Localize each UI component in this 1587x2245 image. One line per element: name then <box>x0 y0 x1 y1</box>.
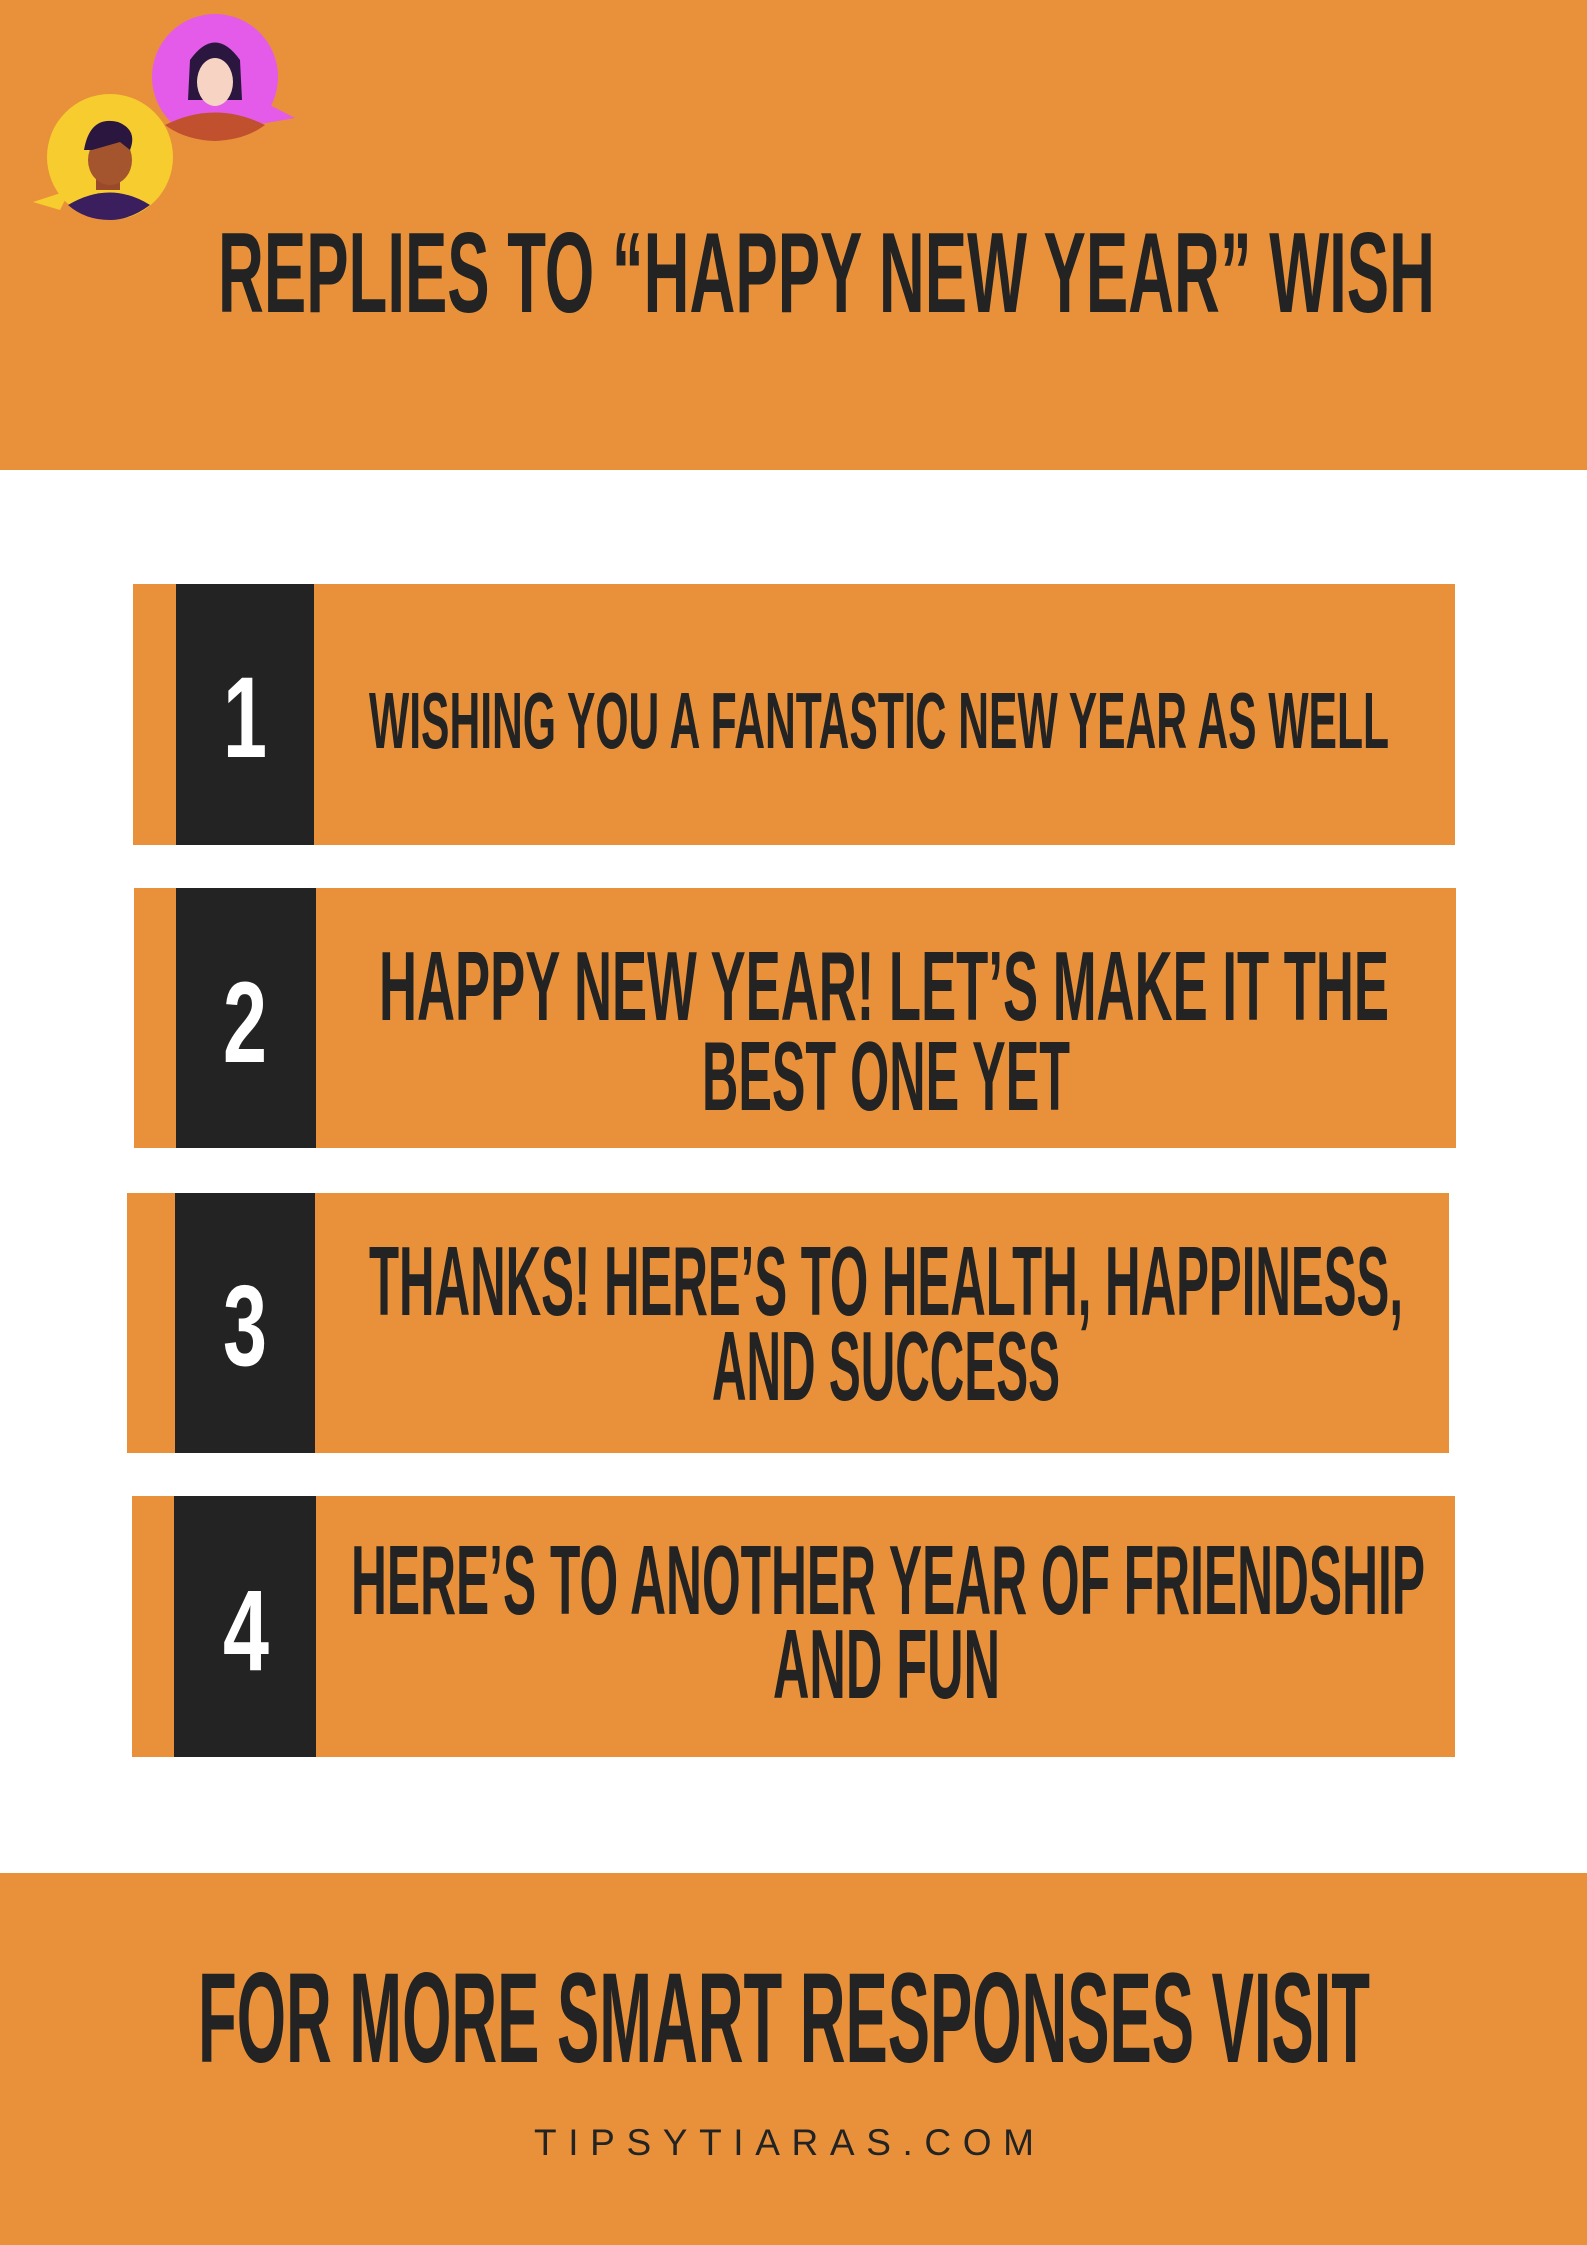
card 3: 3 <box>223 1262 267 1390</box>
card 2: BEST ONE YET <box>702 1021 1070 1131</box>
card 4: 4 <box>223 1567 269 1695</box>
card 3 <box>127 1193 1449 1453</box>
footer panel <box>0 1873 1587 2245</box>
card 1: 1 <box>223 654 267 782</box>
card 3: AND SUCCESS <box>712 1311 1060 1421</box>
icon: man avatar bubble <box>33 94 173 220</box>
footer panel: TIPSYTIARAS.COM <box>534 2122 1034 2163</box>
card 4: AND FUN <box>773 1609 1000 1719</box>
icon: woman avatar bubble <box>152 14 295 141</box>
card 2 <box>134 888 1456 1148</box>
card 1 <box>133 584 1455 845</box>
header panel <box>0 0 1587 470</box>
card 4 <box>132 1496 1455 1757</box>
card 2: 2 <box>223 959 267 1087</box>
